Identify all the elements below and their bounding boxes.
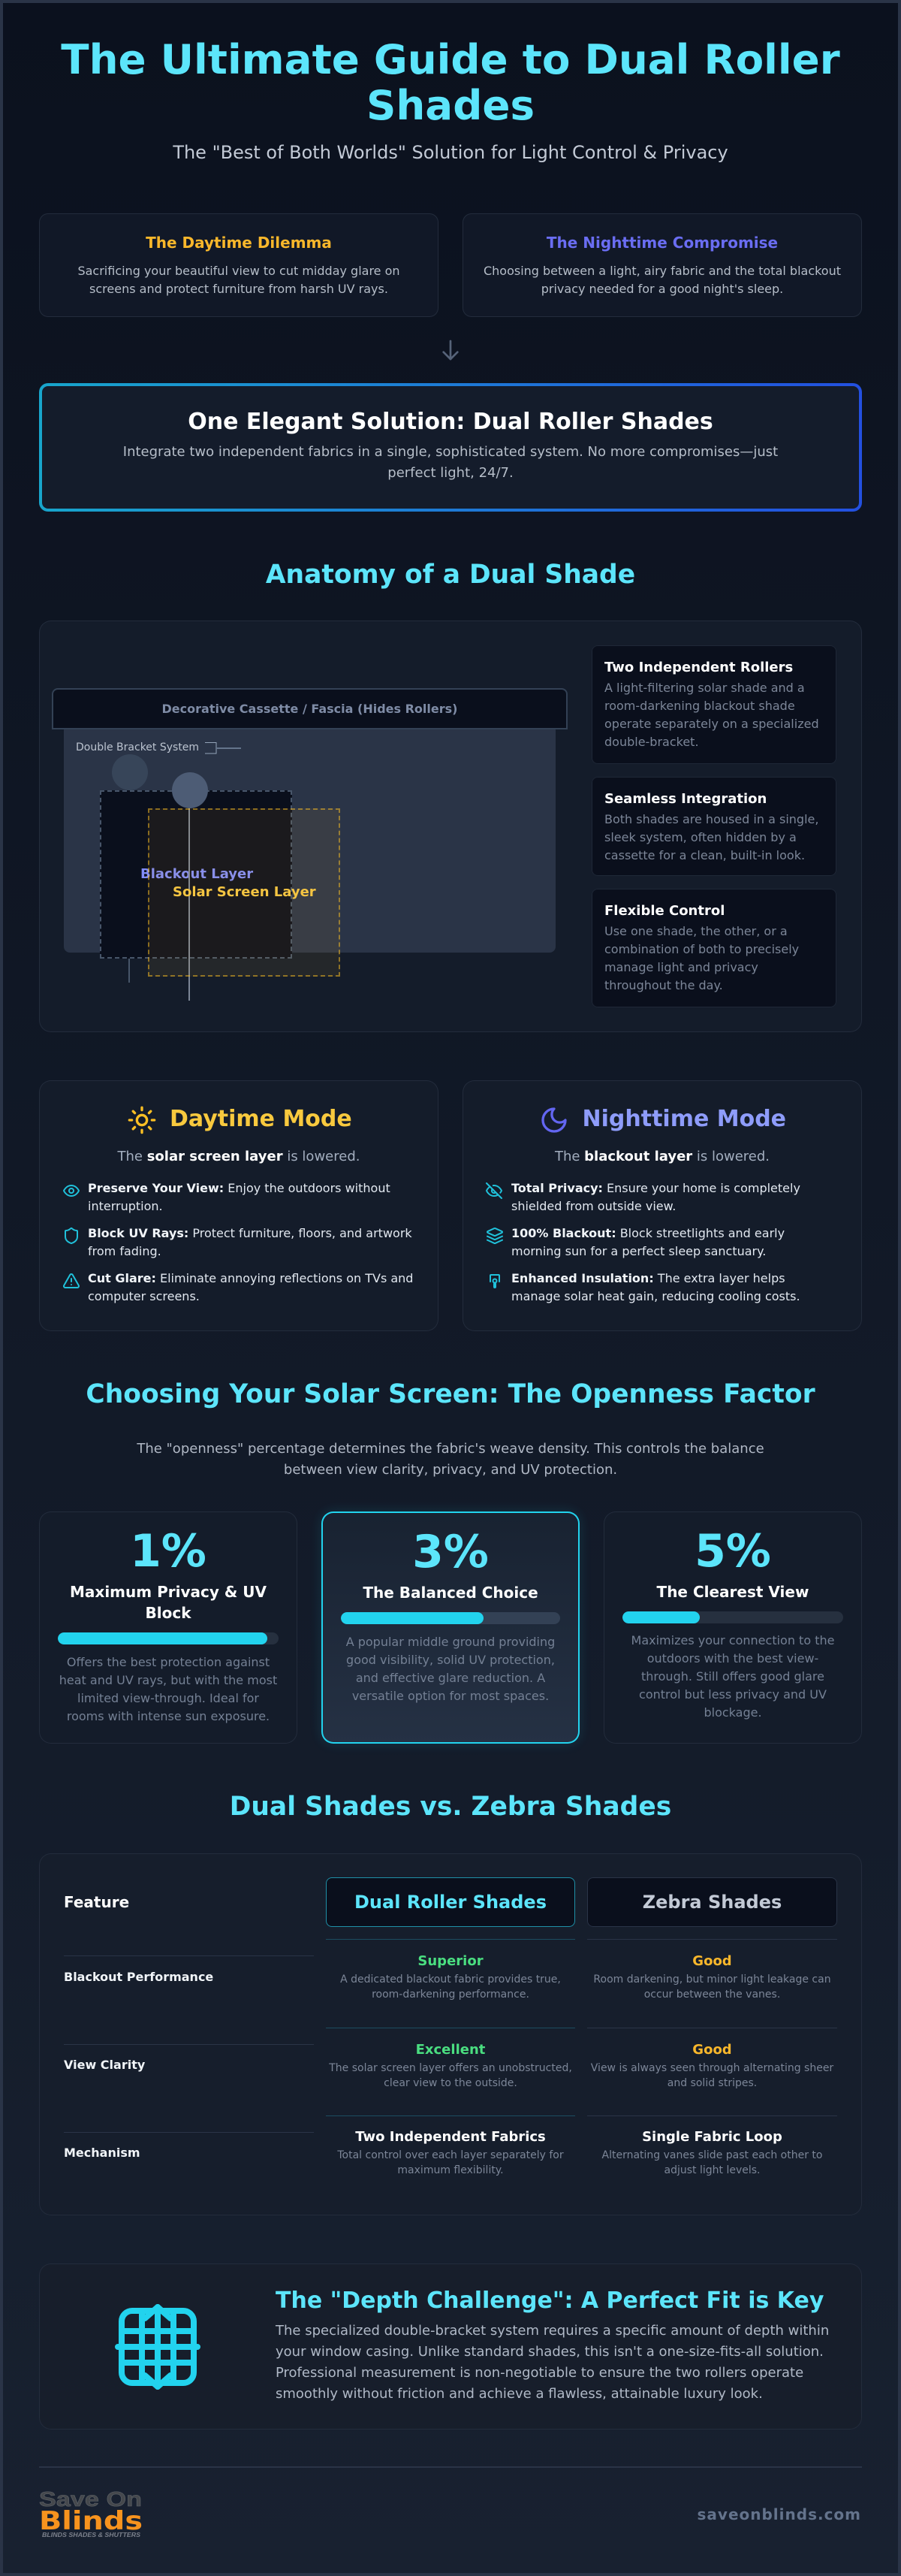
item: total privacy: shielded from outside view. xyxy=(511,1199,676,1213)
icon: sun xyxy=(128,1106,156,1134)
cell: zebra view clarity: and solid stripes. xyxy=(667,2076,757,2088)
heading: daytime dilemma: The Daytime Dilemma xyxy=(146,234,332,252)
heading: Flexible Control xyxy=(604,903,725,919)
item: preserve your view: Preserve Your View: Enjoy the outdoors without xyxy=(88,1181,390,1195)
icon: moon xyxy=(541,1107,567,1133)
header: zebra shades: Zebra Shades xyxy=(643,1892,782,1913)
text: room-darkening blackout shade xyxy=(604,699,795,713)
text: daytime dilemma: screens and protect furniture from harsh UV rays. xyxy=(89,282,388,296)
cell: zebra mechanism: adjust light levels. xyxy=(664,2164,760,2176)
cell: dual view clarity: Excellent xyxy=(416,2042,485,2057)
icon: insulation xyxy=(490,1274,500,1288)
panel: nighttime mode xyxy=(463,1080,862,1331)
text: depth challenge: Professional measurement is non-negotiable to ensure the two rollers operate xyxy=(276,2365,803,2381)
text: openness intro: The "openness" percentage determines the fabric's weave density. This controls the balance xyxy=(137,1441,764,1457)
cell: zebra view clarity: Good xyxy=(692,2042,732,2057)
heading: solution: One Elegant Solution: Dual Roller Shades xyxy=(188,409,713,435)
text: good visibility, solid UV protection, xyxy=(346,1653,555,1667)
icon: layers xyxy=(487,1228,503,1244)
panel: daytime mode xyxy=(39,1080,438,1331)
roller: front (solar) xyxy=(172,772,208,808)
item: cut glare xyxy=(88,1271,413,1303)
text: combination of both to precisely xyxy=(604,942,799,956)
text: nighttime compromise xyxy=(484,264,841,296)
item: preserve your view: interruption. xyxy=(88,1199,163,1213)
item: enhanced insulation: manage solar heat gain, reducing cooling costs. xyxy=(511,1289,800,1303)
item: total privacy xyxy=(511,1181,800,1213)
solar screen layer xyxy=(148,808,340,977)
panel: anatomy xyxy=(39,621,862,1032)
text: through. Still offers good glare xyxy=(641,1669,824,1684)
stat: 5%: 5% xyxy=(695,1525,771,1578)
icon: warning triangle xyxy=(63,1273,80,1288)
text xyxy=(631,1633,834,1720)
text: openness intro: between view clarity, privacy, and UV protection. xyxy=(284,1462,617,1478)
cell: dual blackout xyxy=(340,1953,561,2001)
cell: dual view clarity xyxy=(329,2042,572,2088)
info card: two independent rollers xyxy=(592,645,836,764)
icon: arrow down xyxy=(442,340,459,361)
text: depth challenge: your window casing. Unlike standard shades, this isn't a one-size-fits-all solution. xyxy=(276,2344,824,2360)
cassette / fascia: Decorative Cassette / Fascia (Hides Rollers) xyxy=(162,702,457,716)
text: nighttime compromise: privacy needed for a good night's sleep. xyxy=(541,282,783,296)
text: A popular middle ground providing xyxy=(346,1635,555,1649)
text: daytime dilemma xyxy=(77,264,400,296)
heading: Seamless Integration xyxy=(604,791,767,807)
cell: dual blackout: A dedicated blackout fabric provides true, xyxy=(340,1974,561,1986)
text: rooms with intense sun exposure. xyxy=(67,1708,270,1723)
heading: Maximum Privacy & UV xyxy=(70,1583,267,1601)
header: zebra shades xyxy=(587,1877,837,1927)
item: enhanced insulation: Enhanced Insulation: The extra layer helps xyxy=(511,1271,785,1285)
label: double bracket system: Double Bracket System xyxy=(76,741,199,753)
row label: view clarity: View Clarity xyxy=(64,2058,145,2072)
text xyxy=(604,681,819,749)
stat: 3%: 3% xyxy=(412,1526,489,1578)
cell: dual mechanism: Two Independent Fabrics xyxy=(355,2129,546,2145)
text: heat and UV rays, but with the most xyxy=(59,1672,277,1687)
cell: zebra blackout xyxy=(593,1953,831,2001)
text: depth challenge: smoothly without friction and achieve a flawless, attainable luxury look. xyxy=(276,2386,763,2402)
text: sleek system, often hidden by a xyxy=(604,830,797,844)
cassette / fascia xyxy=(52,688,568,729)
text: and effective glare reduction. A xyxy=(356,1671,545,1685)
blackout layer xyxy=(100,790,292,959)
panel: 1% openness xyxy=(39,1511,297,1744)
text: depth challenge: The specialized double-bracket system requires a specific amount of depth within xyxy=(276,2323,829,2339)
text: outdoors with the best view- xyxy=(647,1651,818,1665)
icon: eye off xyxy=(486,1182,502,1199)
cell: zebra blackout: Good xyxy=(692,1953,732,1969)
text: solution xyxy=(123,444,778,481)
text: throughout the day. xyxy=(604,978,723,992)
progress bar: 65% xyxy=(341,1612,560,1624)
item: preserve your view xyxy=(88,1181,390,1213)
header: dual roller shades xyxy=(326,1877,575,1927)
item: cut glare: Cut Glare: Eliminate annoying reflections on TVs and xyxy=(88,1271,413,1285)
heading: Block xyxy=(146,1604,191,1622)
heading: The Balanced Choice xyxy=(363,1584,538,1602)
footer: website: saveonblinds.com xyxy=(697,2505,861,2523)
progress bar: 95% xyxy=(58,1632,279,1644)
cell: zebra mechanism xyxy=(602,2129,822,2176)
cell: dual mechanism: Total control over each layer separately for xyxy=(337,2149,564,2161)
text: control but less privacy and UV xyxy=(639,1687,827,1702)
wall / window recess xyxy=(64,729,556,953)
item: 100% blackout: 100% Blackout: Block streetlights and early xyxy=(511,1226,785,1240)
subtitle: The "Best of Both Worlds" Solution for Light Control & Privacy xyxy=(173,142,728,163)
cell: dual blackout: room-darkening performance. xyxy=(372,1989,529,2001)
panel: comparison table xyxy=(39,1853,862,2215)
text: daytime dilemma: Sacrificing your beautiful view to cut midday glare on xyxy=(77,264,400,278)
info card: flexible control xyxy=(592,889,836,1007)
cell: zebra mechanism: Single Fabric Loop xyxy=(642,2129,782,2145)
text xyxy=(604,812,818,862)
heading: nighttime compromise: The Nighttime Compromise xyxy=(547,234,778,252)
cell: zebra mechanism: Alternating vanes slide past each other to xyxy=(602,2149,822,2161)
text: solution: perfect light, 24/7. xyxy=(387,465,514,481)
icon: shield xyxy=(65,1228,78,1244)
text xyxy=(59,1654,277,1723)
text: limited view-through. Ideal for xyxy=(77,1690,259,1705)
logo: Save On Blinds: BLINDS SHADES & SHUTTERS xyxy=(42,2532,141,2538)
text: solar screen lowered: The solar screen layer is lowered. xyxy=(118,1149,360,1164)
title: The Ultimate Guide to Dual Roller Shades xyxy=(61,35,840,129)
icon: depth grid xyxy=(115,2304,200,2390)
text: operate separately on a specialized xyxy=(604,717,819,731)
roller: back (blackout) xyxy=(112,754,148,790)
text: nighttime compromise: Choosing between a light, airy fabric and the total blackout xyxy=(484,264,841,278)
heading: depth challenge: The "Depth Challenge": A Perfect Fit is Key xyxy=(276,2288,824,2314)
icon: eye xyxy=(63,1185,80,1197)
panel: depth challenge xyxy=(39,2263,862,2430)
cell: zebra view clarity: View is always seen through alternating sheer xyxy=(591,2061,833,2073)
item: total privacy: Total Privacy: Ensure your home is completely xyxy=(511,1181,800,1195)
panel: 3% openness (highlighted) xyxy=(321,1511,580,1744)
text: Both shades are housed in a single, xyxy=(604,812,818,826)
text: cassette for a clean, built-in look. xyxy=(604,848,805,862)
heading: The Clearest View xyxy=(657,1583,809,1601)
panel: the daytime dilemma xyxy=(39,213,438,317)
item: 100% blackout: morning sun for a perfect sleep sanctuary. xyxy=(511,1244,766,1258)
item: block uv rays: from fading. xyxy=(88,1244,161,1258)
text: manage light and privacy xyxy=(604,960,758,974)
heading: nighttime mode: Nighttime Mode xyxy=(583,1106,786,1132)
header: dual roller shades: Dual Roller Shades xyxy=(354,1892,547,1913)
heading: dual vs zebra: Dual Shades vs. Zebra Shades xyxy=(230,1792,671,1822)
logo: Save On Blinds: Blinds xyxy=(39,2506,143,2536)
item: enhanced insulation xyxy=(511,1271,800,1303)
text xyxy=(604,924,799,992)
heading: Two Independent Rollers xyxy=(604,660,793,675)
cell: dual blackout: Superior xyxy=(417,1953,484,1969)
item: block uv rays xyxy=(88,1226,412,1258)
progress bar: 35% xyxy=(622,1611,843,1623)
label: blackout layer: Blackout Layer xyxy=(140,866,253,882)
cell: zebra blackout: occur between the vanes. xyxy=(644,1989,780,2001)
text: solution: Integrate two independent fabrics in a single, sophisticated system. No more compromises—just xyxy=(123,444,778,460)
heading: openness factor: Choosing Your Solar Screen: The Openness Factor xyxy=(86,1379,815,1409)
text: depth challenge xyxy=(275,2323,829,2402)
heading: daytime mode: Daytime Mode xyxy=(170,1106,352,1132)
stat: 1%: 1% xyxy=(130,1525,206,1578)
heading: anatomy of a dual shade: Anatomy of a Dual Shade xyxy=(266,560,635,590)
row label: mechanism: Mechanism xyxy=(64,2146,140,2160)
item: 100% blackout xyxy=(511,1226,785,1258)
logo: Save On Blinds xyxy=(39,2488,143,2538)
cord: back xyxy=(128,959,130,983)
text: openness intro xyxy=(137,1441,764,1478)
diagram: dual shade anatomy xyxy=(52,688,568,1001)
text: Offers the best protection against xyxy=(67,1654,270,1669)
cell: dual view clarity: The solar screen layer offers an unobstructed, xyxy=(329,2061,572,2073)
cord: front xyxy=(188,808,190,1001)
text: blackout lowered: The blackout layer is lowered. xyxy=(555,1149,770,1164)
panel: one elegant solution xyxy=(39,383,862,512)
text: Use one shade, the other, or a xyxy=(604,924,788,938)
header: feature: Feature xyxy=(64,1893,129,1911)
text: blockage. xyxy=(704,1705,762,1720)
info card: seamless integration xyxy=(592,777,836,876)
item: block uv rays: Block UV Rays: Protect furniture, floors, and artwork xyxy=(88,1226,412,1240)
text: A light-filtering solar shade and a xyxy=(604,681,805,695)
panel: the nighttime compromise xyxy=(463,213,862,317)
text: versatile option for most spaces. xyxy=(352,1689,549,1703)
item: cut glare: computer screens. xyxy=(88,1289,200,1303)
cell: dual view clarity: clear view to the outside. xyxy=(384,2076,517,2088)
text: Maximizes your connection to the xyxy=(631,1633,834,1647)
heading xyxy=(70,1583,267,1622)
icon: bracket xyxy=(205,742,241,754)
cell: zebra blackout: Room darkening, but minor light leakage can xyxy=(593,1974,831,1986)
row label: blackout performance: Blackout Performance xyxy=(64,1970,213,1984)
cell: zebra view clarity xyxy=(590,2042,833,2088)
cell: dual mechanism xyxy=(337,2129,564,2176)
cell: dual mechanism: maximum flexibility. xyxy=(397,2164,504,2176)
label: solar screen layer: Solar Screen Layer xyxy=(173,884,316,900)
panel: 5% openness xyxy=(604,1511,862,1744)
text xyxy=(346,1635,555,1703)
text: double-bracket. xyxy=(604,735,699,749)
